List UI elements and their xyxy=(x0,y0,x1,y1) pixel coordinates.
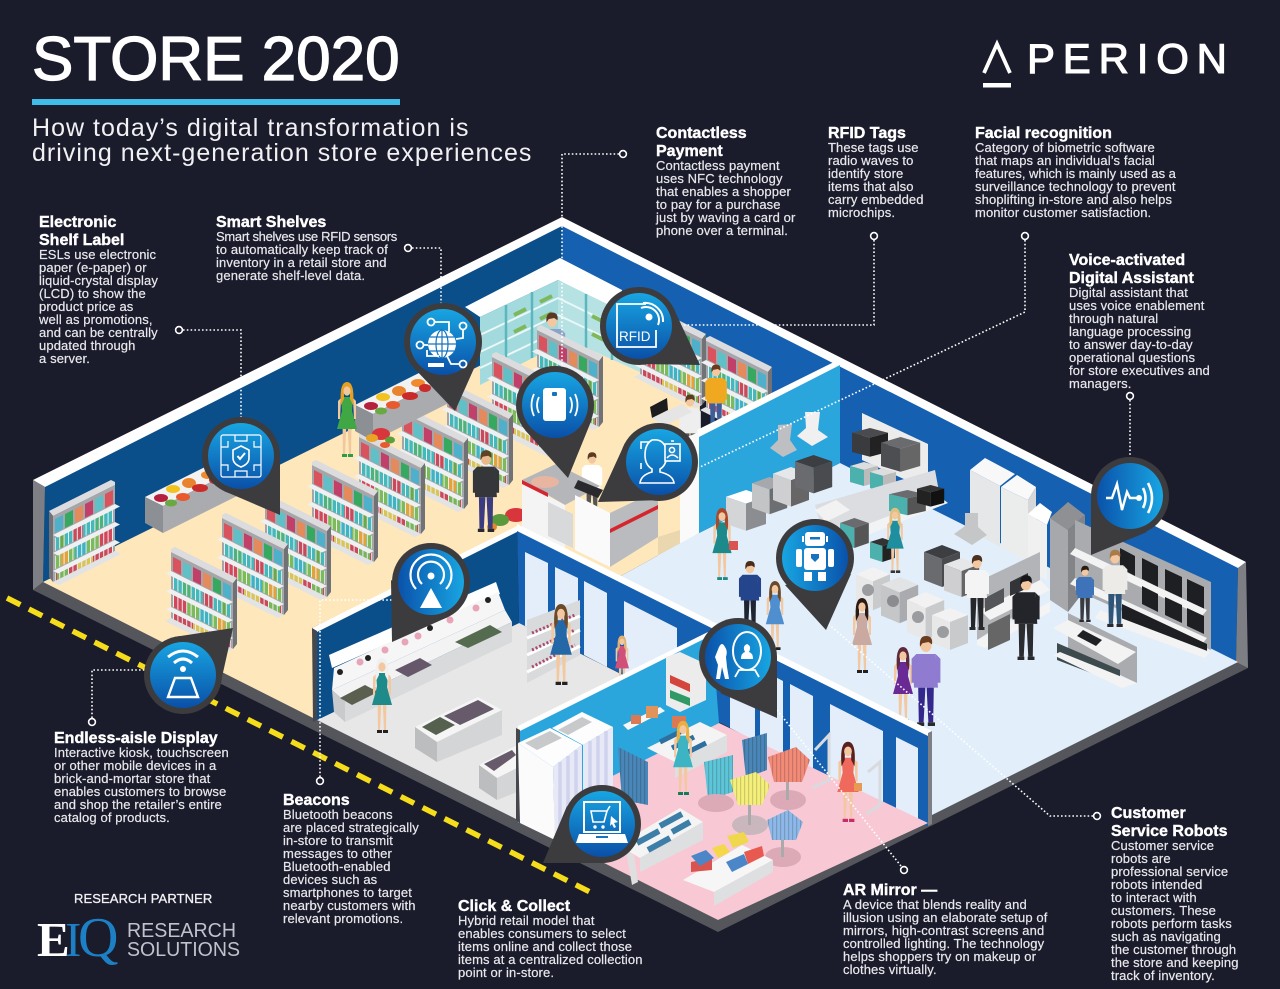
EIQ Research Solutions logo: SOLUTIONS xyxy=(127,939,240,961)
text: Voice-activated Digital Assistant: Digital Assistant xyxy=(1069,270,1194,287)
text: RFID Tags: radio waves to xyxy=(828,153,914,168)
text: Click & Collect: items online and collect those xyxy=(458,939,632,954)
text: Beacons: nearby customers with xyxy=(283,898,416,913)
pin: Beacons xyxy=(391,543,470,642)
text: Beacons: messages to other xyxy=(283,846,392,861)
text: Customer Service Robots: to interact with xyxy=(1111,890,1197,905)
leader end: Contactless xyxy=(620,151,626,157)
text: Facial recognition: Facial recognition xyxy=(975,125,1112,142)
leader end: RFID xyxy=(871,233,877,239)
title underline xyxy=(32,99,400,105)
text: Voice-activated Digital Assistant: for store executives and xyxy=(1069,363,1210,378)
text: AR Mirror: illusion using an elaborate setup of xyxy=(843,910,1048,925)
fruit piles xyxy=(366,428,527,531)
store floor plan xyxy=(33,217,1248,932)
text: Electronic Shelf Label: Shelf Label xyxy=(39,232,124,249)
text: Electronic Shelf Label: a server. xyxy=(39,351,90,366)
leader end: Electronic Shelf Label xyxy=(176,327,182,333)
text: Beacons: are placed strategically xyxy=(283,820,419,835)
pin: Facial recognition xyxy=(598,423,698,502)
text: Customer Service Robots: robots perform tasks xyxy=(1111,916,1232,931)
pin: AR Mirror xyxy=(699,618,777,718)
text: Facial recognition: features, which is mainly used as a xyxy=(975,166,1176,181)
text: Contactless Payment: phone over a terminal. xyxy=(656,223,788,238)
text: Endless-aisle Display: catalog of products. xyxy=(54,810,170,825)
checkout counters xyxy=(522,398,699,567)
pharmacy fridges xyxy=(480,280,640,385)
text: Voice-activated Digital Assistant: Voice-activated xyxy=(1069,252,1185,269)
text: Electronic Shelf Label: paper (e-paper) or xyxy=(39,260,147,275)
text: Smart Shelves xyxy=(216,214,397,283)
text: Contactless Payment: just by waving a card or xyxy=(656,210,795,225)
range hoods xyxy=(770,412,828,457)
text: Customer Service Robots: robots are xyxy=(1111,851,1171,866)
oven shelf xyxy=(815,413,948,562)
partition windows xyxy=(525,552,918,822)
text: Electronic Shelf Label xyxy=(38,214,158,366)
text: Customer Service Robots: track of inventory. xyxy=(1111,968,1215,983)
text: Click & Collect xyxy=(458,898,643,980)
folding table back xyxy=(647,716,727,778)
EIQ Research Solutions logo: E xyxy=(37,912,70,967)
text: Voice-activated Digital Assistant: Digital assistant that xyxy=(1069,285,1188,300)
clothes shelf xyxy=(666,652,706,712)
subtitle xyxy=(32,114,532,166)
fitting rooms xyxy=(518,712,613,840)
leader end: Endless aisle xyxy=(89,719,95,725)
text: Beacons: in-store to transmit xyxy=(283,833,393,848)
text: Smart Shelves: Smart shelves use RFID sensors xyxy=(216,229,397,244)
text: Voice-activated Digital Assistant: uses voice enablement xyxy=(1069,298,1204,313)
text: Endless-aisle Display: and shop the retailer’s entire xyxy=(54,797,222,812)
text: Customer Service Robots: such as navigating xyxy=(1111,929,1221,944)
pink floor xyxy=(518,723,928,920)
left outer wall xyxy=(43,226,562,582)
text: Endless-aisle Display xyxy=(54,730,229,825)
text: Contactless Payment: that enables a shopper xyxy=(656,184,791,199)
text: Voice-activated Digital Assistant xyxy=(1068,252,1210,391)
text: Endless-aisle Display: Endless-aisle Display xyxy=(54,730,218,747)
text: Beacons: Beacons xyxy=(283,792,350,809)
text: Customer Service Robots: professional service xyxy=(1111,864,1228,879)
fruit bins xyxy=(145,457,243,533)
title: STORE 2020 xyxy=(32,25,400,94)
computer island xyxy=(977,552,1050,650)
text: Customer Service Robots: Customer service xyxy=(1111,838,1214,853)
washing machines xyxy=(856,567,968,650)
kitchen appliances xyxy=(726,455,832,531)
text: Smart Shelves: inventory in a retail store and xyxy=(216,255,387,270)
text: Facial recognition: Category of biometric software xyxy=(975,140,1155,155)
Aperion logo: PERION xyxy=(1027,35,1227,82)
text: Smart Shelves: generate shelf-level data. xyxy=(216,268,365,283)
text: Customer Service Robots xyxy=(1111,805,1239,983)
road: yellow dashed line xyxy=(7,598,590,892)
text: Click & Collect: items at a centralized collection xyxy=(458,952,643,967)
fashion tables xyxy=(618,808,773,906)
text: Customer Service Robots: customers. These xyxy=(1111,903,1216,918)
EIQ Research Solutions logo: Q xyxy=(78,907,118,969)
text: Electronic Shelf Label: ESLs use electronic xyxy=(39,247,156,262)
leader lines xyxy=(92,154,1130,866)
cosmetics wall unit xyxy=(329,582,512,722)
pin: Endless-aisle Display xyxy=(144,628,233,714)
TV wall shelves xyxy=(1070,520,1211,658)
text: Contactless Payment: Contactless xyxy=(656,125,747,142)
text: Facial recognition: monitor customer satisfaction. xyxy=(975,205,1151,220)
text: Voice-activated Digital Assistant: managers. xyxy=(1069,376,1132,391)
right outer wall xyxy=(562,226,1238,662)
text: Contactless Payment: Payment xyxy=(656,143,723,160)
text: Customer Service Robots: the store and keeping xyxy=(1111,955,1239,970)
EIQ Research Solutions logo: I xyxy=(65,912,81,967)
text: Electronic Shelf Label: liquid-crystal display xyxy=(39,273,158,288)
text: RFID Tags: identify store xyxy=(828,166,903,181)
text: Customer Service Robots: the customer through xyxy=(1111,942,1236,957)
text: Facial recognition xyxy=(975,125,1176,220)
accessories wall xyxy=(518,633,719,823)
text: RFID Tags: microchips. xyxy=(828,205,895,220)
pin: Click and Collect xyxy=(543,785,641,863)
text: Beacons: smartphones to target xyxy=(283,885,412,900)
shelf gondolas xyxy=(49,303,772,652)
text: Electronic Shelf Label: product price as xyxy=(39,299,133,314)
text: Click & Collect: Click & Collect xyxy=(458,898,570,915)
text: Customer Service Robots: Customer xyxy=(1111,805,1186,822)
leader end: Voice xyxy=(1127,393,1133,399)
text: Smart Shelves: Smart Shelves xyxy=(216,214,326,231)
back soffit xyxy=(465,258,622,317)
text: AR Mirror: AR Mirror — xyxy=(843,882,937,899)
EIQ Research Solutions logo xyxy=(37,907,240,969)
text: Beacons: relevant promotions. xyxy=(283,911,403,926)
text: Beacons: Bluetooth beacons xyxy=(283,807,393,822)
text: Smart Shelves: to automatically keep track of xyxy=(216,242,388,257)
base edge xyxy=(33,582,1248,932)
wall top strip xyxy=(33,217,1246,568)
text: Contactless Payment: Contactless payment xyxy=(656,158,780,173)
cosmetics tables xyxy=(415,697,517,800)
pin: RFID Tags: RFID xyxy=(619,329,651,344)
shoppers in electronics xyxy=(712,508,1127,726)
text: Contactless Payment xyxy=(656,125,796,238)
leader end: AR xyxy=(901,867,907,873)
text: AR Mirror xyxy=(842,882,1048,977)
text: Click & Collect: enables consumers to select xyxy=(458,926,626,941)
shoppers in beauty xyxy=(372,604,629,733)
subtitle: driving next-generation store experiences xyxy=(32,138,532,166)
floor stoves xyxy=(924,545,979,597)
leader end: Smart Shelves xyxy=(405,245,411,251)
refrigerators xyxy=(954,458,1085,612)
text: Voice-activated Digital Assistant: through natural xyxy=(1069,311,1158,326)
text: Voice-activated Digital Assistant: to answer day-to-day xyxy=(1069,337,1193,352)
pin: Electronic Shelf Label xyxy=(202,417,280,515)
text: Click & Collect: point or in-store. xyxy=(458,965,554,980)
text: RFID Tags: carry embedded xyxy=(828,192,924,207)
text: Contactless Payment: uses NFC technology xyxy=(656,171,783,186)
text: Contactless Payment: to pay for a purchase xyxy=(656,197,781,212)
leader end: Robots xyxy=(1094,813,1100,819)
shoppers in fashion xyxy=(673,721,862,822)
research partner label: RESEARCH PARTNER xyxy=(74,891,212,906)
EIQ Research Solutions logo: RESEARCH xyxy=(127,920,236,942)
kitchen wall xyxy=(699,364,840,533)
text: AR Mirror: A device that blends reality and xyxy=(843,897,1027,912)
text: Electronic Shelf Label: (LCD) to show the xyxy=(39,286,146,301)
pin: RFID Tags xyxy=(600,287,700,365)
text: RFID Tags xyxy=(828,125,924,220)
subtitle: How today’s digital transformation is xyxy=(32,114,469,142)
beauty floor xyxy=(317,623,719,820)
clothing racks xyxy=(618,733,810,867)
text: Endless-aisle Display: enables customers to browse xyxy=(54,784,226,799)
beauty wall xyxy=(317,532,519,720)
text: Voice-activated Digital Assistant: operational questions xyxy=(1069,350,1195,365)
pin: Voice-activated Digital Assistant xyxy=(1091,457,1169,555)
electronics floor xyxy=(617,463,1238,817)
person in fridge aisle xyxy=(539,312,565,395)
text: Beacons: Bluetooth-enabled xyxy=(283,859,391,874)
monitor xyxy=(650,398,668,418)
text: Electronic Shelf Label: well as promotions, xyxy=(39,312,153,327)
grocery floor xyxy=(43,325,700,720)
audio display xyxy=(1053,613,1137,688)
text: Electronic Shelf Label: updated through xyxy=(39,338,136,353)
text: Customer Service Robots: robots intended xyxy=(1111,877,1202,892)
text: Endless-aisle Display: brick-and-mortar store that xyxy=(54,771,210,786)
text: Facial recognition: that maps an individual’s facial xyxy=(975,153,1155,168)
makeup rack xyxy=(527,600,580,683)
text: AR Mirror: mirrors, high-contrast screens and xyxy=(843,923,1044,938)
text: Voice-activated Digital Assistant: language processing xyxy=(1069,324,1191,339)
text: Electronic Shelf Label: and can be centrally xyxy=(39,325,158,340)
text: RFID Tags: items that also xyxy=(828,179,914,194)
text: AR Mirror: helps shoppers try on makeup or xyxy=(843,949,1036,964)
shoppers in grocery xyxy=(337,364,727,532)
text: Beacons: devices such as xyxy=(283,872,377,887)
text: Facial recognition: shoplifting in-store and also helps xyxy=(975,192,1172,207)
pin: Contactless Payment xyxy=(516,366,594,478)
text: RFID Tags: These tags use xyxy=(828,140,919,155)
text: Click & Collect: Hybrid retail model that xyxy=(458,913,595,928)
security gates xyxy=(812,735,880,814)
leader end: Beacons xyxy=(317,778,323,784)
handbag shelf xyxy=(623,706,665,730)
text: AR Mirror: controlled lighting. The technology xyxy=(843,936,1044,951)
text: Customer Service Robots: Service Robots xyxy=(1111,823,1227,840)
text: Beacons xyxy=(283,792,419,926)
text: RFID Tags: RFID Tags xyxy=(828,125,906,142)
leader end: Facial xyxy=(1022,233,1028,239)
text: Facial recognition: surveillance technology to prevent xyxy=(975,179,1176,194)
partition wall xyxy=(517,528,928,826)
text: Endless-aisle Display: or other mobile devices in a xyxy=(54,758,216,773)
text: Electronic Shelf Label: Electronic xyxy=(39,214,116,231)
text: Endless-aisle Display: Interactive kiosk, touchscreen xyxy=(54,745,229,760)
text: AR Mirror: clothes virtually. xyxy=(843,962,937,977)
pin: Customer Service Robots xyxy=(776,519,854,630)
pin: Smart Shelves xyxy=(404,303,482,411)
